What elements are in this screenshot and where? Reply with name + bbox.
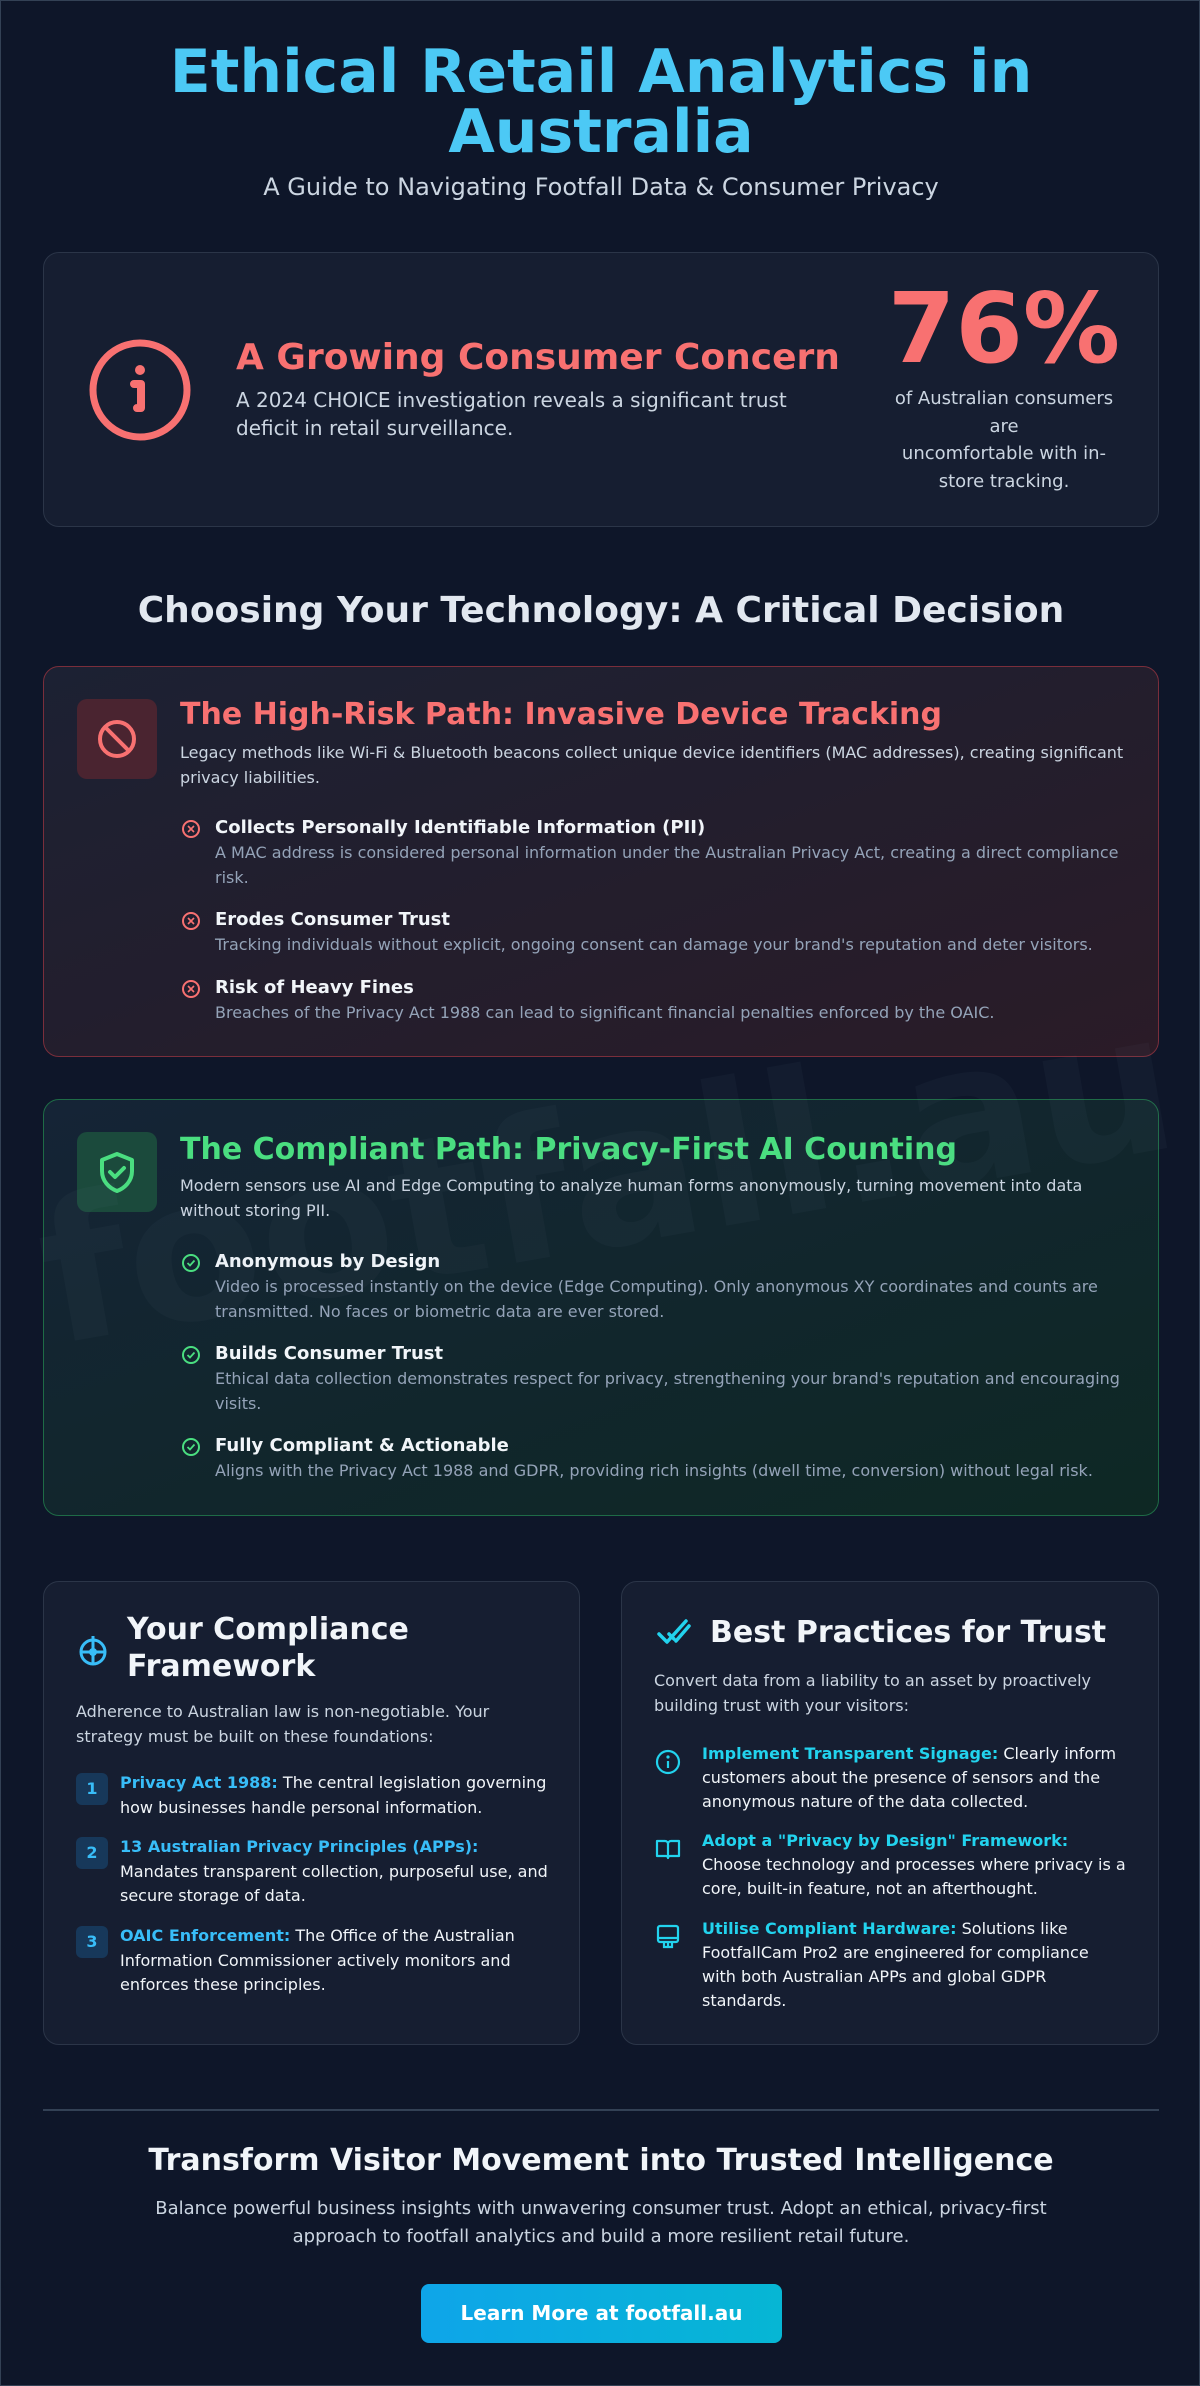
item: fully compliant [182, 1435, 1093, 1480]
closing text: Balance powerful business insights with unwavering consumer trust. Adopt an ethical, privacy-first [155, 2198, 1047, 2219]
item: signage: Implement Transparent Signage: Clearly inform customers about the presence of sensors and the anonymous nature of the data collected. [702, 1744, 1116, 1811]
description: Legacy methods like Wi-Fi & Bluetooth beacons collect unique device identifiers (MAC addresses), creating significant privacy liabilities. [180, 743, 1123, 787]
heading: Your Compliance [127, 1612, 409, 1647]
heading [126, 1612, 409, 1684]
icon: info circle [90, 340, 190, 440]
item: fines [182, 977, 994, 1022]
watermark: footfall.au [23, 967, 1192, 1391]
item: fines: Breaches of the Privacy Act 1988 can lead to significant financial penalties enforced by the OAIC. [215, 1003, 994, 1022]
item: privacy by design: Choose technology and processes where privacy is a core, built-in feature, not an afterthought. [702, 1855, 1126, 1898]
item: PII: Collects Personally Identifiable Information (PII) [215, 817, 705, 838]
item: anonymous [182, 1251, 1098, 1320]
item: PII: A MAC address is considered personal information under the Australian Privacy Act, creating a direct compliance risk. [215, 843, 1119, 886]
closing heading: Transform Visitor Movement into Trusted Intelligence [148, 2143, 1054, 2178]
closing text [155, 2198, 1047, 2247]
item: trust: Tracking individuals without explicit, ongoing consent can damage your brand's reputation and deter visitors. [215, 935, 1093, 954]
item: privacy by design [656, 1831, 1126, 1898]
title: Australia [448, 97, 754, 167]
item: builds trust: Builds Consumer Trust [215, 1343, 443, 1364]
closing text: approach to footfall analytics and build a more resilient retail future. [293, 2226, 909, 2247]
item: privacy by design: Adopt a "Privacy by Design" Framework: [702, 1831, 1068, 1850]
panel: consumer concern [43, 252, 1159, 527]
item: anonymous: Video is processed instantly on the device (Edge Computing). Only anonymous XY coordinates and counts are transmitted. No faces or biometric data are ever stored. [215, 1277, 1098, 1320]
subtitle: A Guide to Navigating Footfall Data & Consumer Privacy [263, 173, 939, 201]
heading: A Growing Consumer Concern [236, 337, 840, 378]
title: Ethical Retail Analytics in [170, 37, 1032, 107]
item 2: 2 [86, 1843, 98, 1862]
item: fully compliant: Fully Compliant & Actionable [215, 1435, 509, 1456]
item: trust [182, 909, 1093, 954]
panel: compliance framework [43, 1581, 580, 2045]
stat: 76%: uncomfortable with in-store tracking. [902, 443, 1106, 492]
section heading: Choosing Your Technology: A Critical Decision [138, 590, 1064, 631]
icon: compass [80, 1636, 106, 1666]
item 1: Privacy Act 1988: The central legislation governing how businesses handle personal information. [120, 1773, 546, 1816]
stat: 76%: 76% [888, 272, 1120, 385]
icon: double check [657, 1619, 691, 1644]
item 1: 1 [86, 1779, 98, 1798]
item: PII [182, 817, 1119, 886]
item: fully compliant: Aligns with the Privacy Act 1988 and GDPR, providing rich insights (dwell time, conversion) without legal risk. [215, 1461, 1093, 1480]
title [170, 37, 1032, 167]
icon: shield [77, 1132, 157, 1212]
item 3: OAIC Enforcement: The Office of the Australian Information Commissioner actively monitors and enforces these principles. [120, 1926, 515, 1994]
icon: ban [77, 699, 157, 779]
item: builds trust [182, 1343, 1120, 1412]
item 2: 13 Australian Privacy Principles (APPs): Mandates transparent collection, purposeful use, and secure storage of data. [120, 1837, 548, 1905]
item 3: 3 [86, 1932, 98, 1951]
stat: 76%: of Australian consumers are [895, 388, 1113, 436]
heading: The High-Risk Path: Invasive Device Tracking [180, 697, 942, 732]
item: hardware: Utilise Compliant Hardware: Solutions like FootfallCam Pro2 are engineered for compliance with both Australian APPs and global GDPR standards. [702, 1919, 1089, 2010]
panel: high-risk path [43, 666, 1159, 1057]
button: learn more: Learn More at footfall.au [461, 2301, 742, 2325]
heading: Framework [127, 1649, 315, 1684]
heading: The Compliant Path: Privacy-First AI Counting [180, 1132, 957, 1167]
panel: best practices [621, 1581, 1159, 2045]
heading: Best Practices for Trust [710, 1615, 1106, 1650]
text: A 2024 CHOICE investigation reveals a significant trust deficit in retail surveillance. [236, 388, 787, 440]
item: anonymous: Anonymous by Design [215, 1251, 440, 1272]
item: fines: Risk of Heavy Fines [215, 977, 414, 998]
item: builds trust: Ethical data collection demonstrates respect for privacy, strengthening your brand's reputation and encouraging visits. [215, 1369, 1120, 1412]
item: trust: Erodes Consumer Trust [215, 909, 450, 930]
panel: compliant path [43, 1099, 1159, 1516]
description: Adherence to Australian law is non-negotiable. Your strategy must be built on these foundations: [76, 1702, 489, 1746]
description: Modern sensors use AI and Edge Computing to analyze human forms anonymously, turning movement into data without storing PII. [180, 1176, 1082, 1220]
button: learn more [421, 2284, 782, 2343]
description: Convert data from a liability to an asset by proactively building trust with your visitors: [654, 1671, 1091, 1714]
stat: 76% [888, 272, 1120, 492]
